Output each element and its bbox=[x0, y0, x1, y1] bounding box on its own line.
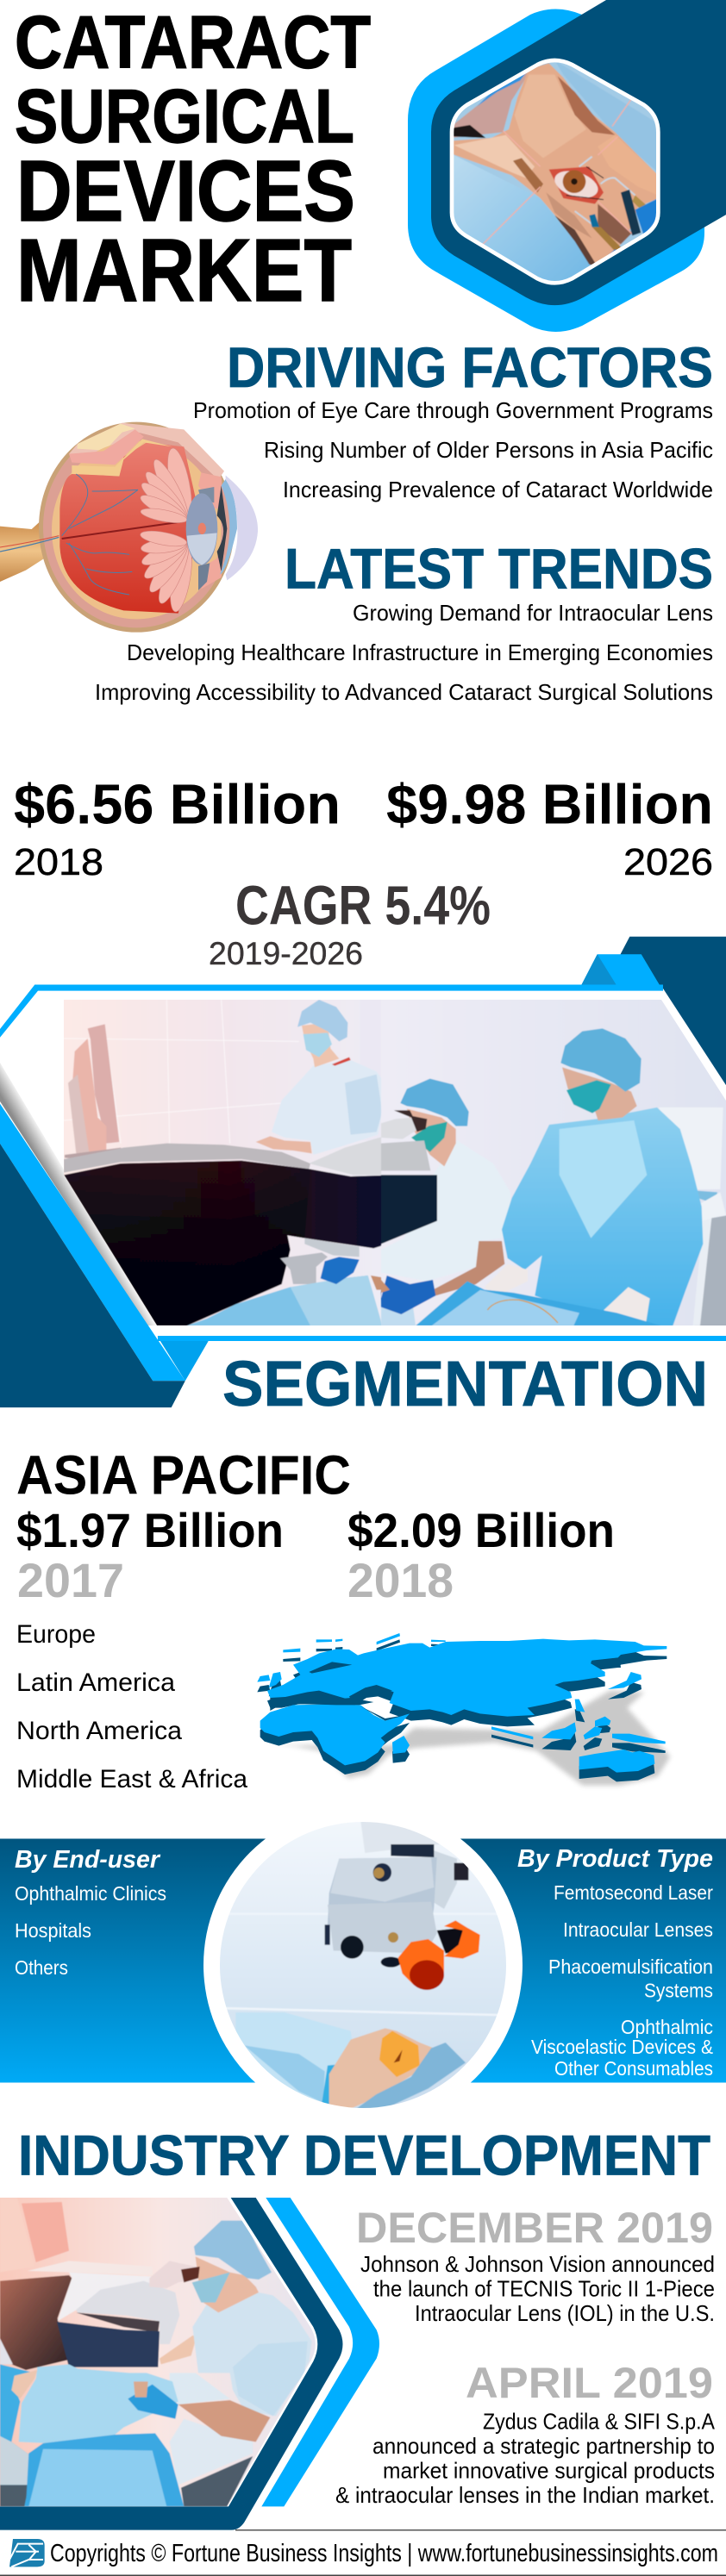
column: by end-user: Ophthalmic Clinics bbox=[15, 1882, 166, 1905]
map side walls bbox=[257, 1639, 667, 1781]
right half of photo bbox=[381, 991, 726, 1330]
asia pacific stats bbox=[16, 1444, 615, 1607]
icon: fortune business insights logo bbox=[9, 2539, 45, 2567]
stat 2017 bbox=[16, 1503, 284, 1607]
left half of photo bbox=[64, 1000, 382, 1325]
development: april 2019: announced a strategic partnership to bbox=[372, 2433, 715, 2459]
photo: surgeon at microscope bbox=[0, 2195, 322, 2510]
column: by product type: Femtosecond Laser bbox=[554, 1881, 713, 1904]
stat 2018: 2018 bbox=[14, 841, 103, 883]
map land tops bbox=[257, 1633, 667, 1773]
column: by product type: By Product Type bbox=[517, 1845, 713, 1873]
hexagon banner with eye surgery photo bbox=[408, 0, 726, 332]
development: december 2019 bbox=[356, 2204, 715, 2326]
driving factors list: Rising Number of Older Persons in Asia Pacific bbox=[264, 437, 713, 463]
map dark sea gaps bbox=[270, 1657, 621, 1721]
stat 2017: 2017 bbox=[17, 1553, 124, 1607]
stat 2018: 2018 bbox=[347, 1553, 454, 1607]
banner with surgery team photo bbox=[0, 937, 726, 1407]
title: CATARACT bbox=[15, 2, 371, 84]
other regions list: North America bbox=[16, 1717, 182, 1745]
column: by product type: Ophthalmic bbox=[621, 2016, 713, 2038]
column: by product type: Other Consumables bbox=[554, 2057, 713, 2080]
column: by end-user bbox=[15, 1846, 166, 1979]
top blue line bbox=[0, 985, 663, 1038]
column: by end-user: Others bbox=[15, 1956, 68, 1979]
cagr bbox=[209, 874, 491, 971]
icon: eye anatomy illustration bbox=[0, 422, 258, 633]
other regions list: Europe bbox=[16, 1620, 96, 1649]
column: by product type: Systems bbox=[644, 1979, 713, 2001]
latest trends list: Improving Accessibility to Advanced Cataract Surgical Solutions bbox=[95, 679, 713, 705]
photo: surgeons at laser machine bbox=[52, 991, 726, 1330]
light blue chevron bbox=[261, 2198, 379, 2506]
heading: segmentation: SEGMENTATION bbox=[222, 1348, 708, 1419]
column: by product type: Intraocular Lenses bbox=[563, 1918, 713, 1941]
top right accent shapes bbox=[581, 937, 726, 1085]
column: by end-user: By End-user bbox=[15, 1846, 161, 1874]
development: april 2019 bbox=[335, 2359, 716, 2508]
title bbox=[15, 2, 371, 320]
other regions list bbox=[16, 1620, 247, 1793]
map: eastern hemisphere bbox=[257, 1633, 670, 1786]
stat 2026: $9.98 Billion bbox=[386, 772, 713, 836]
dark blue chevron bbox=[0, 2198, 342, 2530]
asia pacific stats: ASIA PACIFIC bbox=[16, 1444, 351, 1506]
title: DEVICES bbox=[16, 143, 355, 240]
photo panel: surgeon with chevrons bbox=[0, 2195, 379, 2530]
stat 2017: $1.97 Billion bbox=[16, 1503, 284, 1557]
stat 2018 bbox=[14, 772, 341, 883]
stat 2018: $2.09 Billion bbox=[347, 1503, 615, 1557]
bottom-left accent shapes bbox=[0, 1104, 209, 1407]
column: by end-user: Hospitals bbox=[15, 1919, 91, 1942]
light blue hexagon bbox=[408, 9, 704, 332]
latest trends list: Developing Healthcare Infrastructure in Emerging Economies bbox=[127, 639, 713, 665]
stat 2018: $6.56 Billion bbox=[14, 772, 341, 836]
circle photo: microscope and patient bbox=[203, 1822, 523, 2108]
stat 2018 bbox=[347, 1503, 615, 1607]
dark blue hexagon band bbox=[431, 0, 726, 305]
column: by product type bbox=[517, 1845, 713, 2080]
photo: eye surgery bbox=[448, 54, 664, 290]
column: by product type: Phacoemulsification bbox=[548, 1955, 713, 1978]
footer bbox=[0, 2529, 726, 2576]
driving factors list: Increasing Prevalence of Cataract Worldwide bbox=[283, 477, 713, 502]
title: MARKET bbox=[16, 221, 352, 320]
other regions list: Middle East & Africa bbox=[16, 1765, 247, 1793]
development: december 2019: DECEMBER 2019 bbox=[356, 2204, 713, 2252]
other regions list: Latin America bbox=[16, 1668, 175, 1697]
panel: segmentation band bbox=[0, 1839, 726, 2082]
cagr: 2019-2026 bbox=[209, 936, 363, 971]
cagr: CAGR 5.4% bbox=[235, 874, 491, 936]
latest trends list: Growing Demand for Intraocular Lens bbox=[353, 600, 713, 626]
bottom blue line bbox=[158, 1336, 726, 1341]
stat 2026 bbox=[386, 772, 713, 883]
development: april 2019: market innovative surgical products bbox=[383, 2458, 715, 2484]
market size stats bbox=[14, 772, 713, 971]
driving factors list: Promotion of Eye Care through Government Programs bbox=[193, 397, 713, 423]
driving factors list bbox=[193, 397, 713, 502]
development: april 2019: APRIL 2019 bbox=[466, 2359, 713, 2407]
latest trends list bbox=[95, 600, 713, 705]
grey shadow strip bbox=[0, 1063, 157, 1325]
stat 2026: 2026 bbox=[623, 841, 713, 883]
title: SURGICAL bbox=[15, 73, 354, 159]
column: by product type: Viscoelastic Devices & bbox=[531, 2036, 713, 2058]
